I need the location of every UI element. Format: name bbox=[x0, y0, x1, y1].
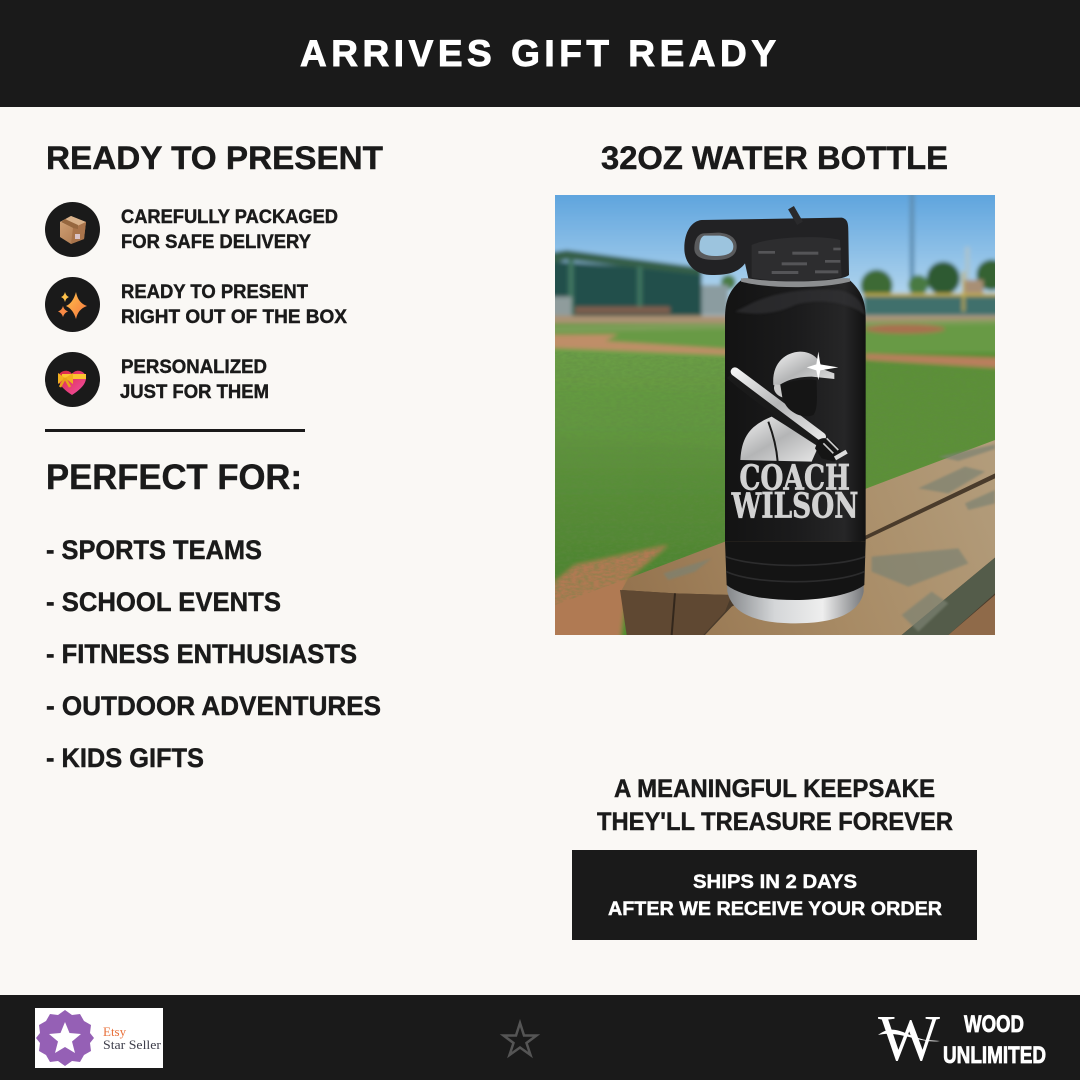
steel base bbox=[727, 586, 864, 624]
list: audiences: - SPORTS TEAMS bbox=[46, 535, 262, 565]
text: personalized: PERSONALIZED bbox=[121, 356, 267, 378]
text: carefully packaged bbox=[121, 206, 338, 253]
text: ready to present bbox=[121, 281, 347, 328]
grass texture bbox=[555, 352, 714, 605]
shipping callout bbox=[572, 850, 977, 940]
straw bbox=[791, 208, 800, 223]
text: personalized bbox=[120, 356, 269, 403]
glint bbox=[807, 352, 838, 380]
feature: ready to present bbox=[45, 277, 347, 332]
icon: package box bbox=[45, 202, 100, 257]
feature: carefully packaged bbox=[45, 202, 338, 257]
badge: etsy star seller bbox=[35, 1008, 163, 1068]
blurred background scene bbox=[555, 195, 995, 635]
badge: etsy star seller: Star Seller bbox=[103, 1038, 162, 1052]
icon: gift heart bbox=[45, 352, 100, 407]
keepsake message bbox=[597, 775, 953, 836]
weathered patches bbox=[663, 444, 995, 632]
engraved baseball coach bbox=[732, 352, 847, 462]
icon: sparkles bbox=[45, 277, 100, 332]
engraved name: COACH bbox=[739, 459, 850, 499]
list: audiences: - FITNESS ENTHUSIASTS bbox=[46, 639, 357, 669]
engraved name: WILSON bbox=[731, 486, 858, 526]
feature: personalized bbox=[45, 352, 269, 407]
bench bbox=[620, 440, 995, 635]
list: audiences: - KIDS GIFTS bbox=[46, 743, 204, 773]
heading: ready to present: READY TO PRESENT bbox=[46, 140, 383, 176]
heading: perfect for: PERFECT FOR: bbox=[46, 458, 302, 497]
footer bar bbox=[0, 995, 1080, 1080]
text: personalized: JUST FOR THEM bbox=[120, 381, 269, 403]
header banner bbox=[0, 0, 1080, 107]
logo: wood unlimited bbox=[878, 1002, 1046, 1075]
shipping callout: AFTER WE RECEIVE YOUR ORDER bbox=[608, 898, 942, 920]
list: audiences bbox=[46, 535, 381, 773]
icon: star outline bbox=[504, 1023, 536, 1055]
bottle body bbox=[725, 278, 866, 542]
logo: wood unlimited: W bbox=[878, 1002, 941, 1075]
title: ARRIVES GIFT READY bbox=[300, 33, 776, 74]
text: carefully packaged: FOR SAFE DELIVERY bbox=[121, 231, 311, 253]
logo: wood unlimited: UNLIMITED bbox=[943, 1042, 1046, 1069]
keepsake message: THEY'LL TREASURE FOREVER bbox=[597, 808, 953, 836]
engraved name bbox=[731, 464, 858, 518]
heading: product name: 32OZ WATER BOTTLE bbox=[601, 140, 948, 176]
keepsake message: A MEANINGFUL KEEPSAKE bbox=[614, 775, 935, 803]
logo: wood unlimited: WOOD bbox=[964, 1011, 1024, 1038]
product photo bbox=[555, 195, 995, 635]
list: audiences: - SCHOOL EVENTS bbox=[46, 587, 281, 617]
grip bands bbox=[725, 542, 866, 600]
badge: etsy star seller: Etsy bbox=[103, 1024, 127, 1039]
text: ready to present: READY TO PRESENT bbox=[121, 281, 308, 303]
text: carefully packaged: CAREFULLY PACKAGED bbox=[121, 206, 338, 228]
shipping callout: SHIPS IN 2 DAYS bbox=[693, 871, 857, 893]
neck ring bbox=[741, 278, 850, 287]
list: audiences: - OUTDOOR ADVENTURES bbox=[46, 691, 381, 721]
cap with loop handle bbox=[684, 218, 849, 281]
water bottle bbox=[684, 208, 866, 623]
text: ready to present: RIGHT OUT OF THE BOX bbox=[121, 306, 347, 328]
